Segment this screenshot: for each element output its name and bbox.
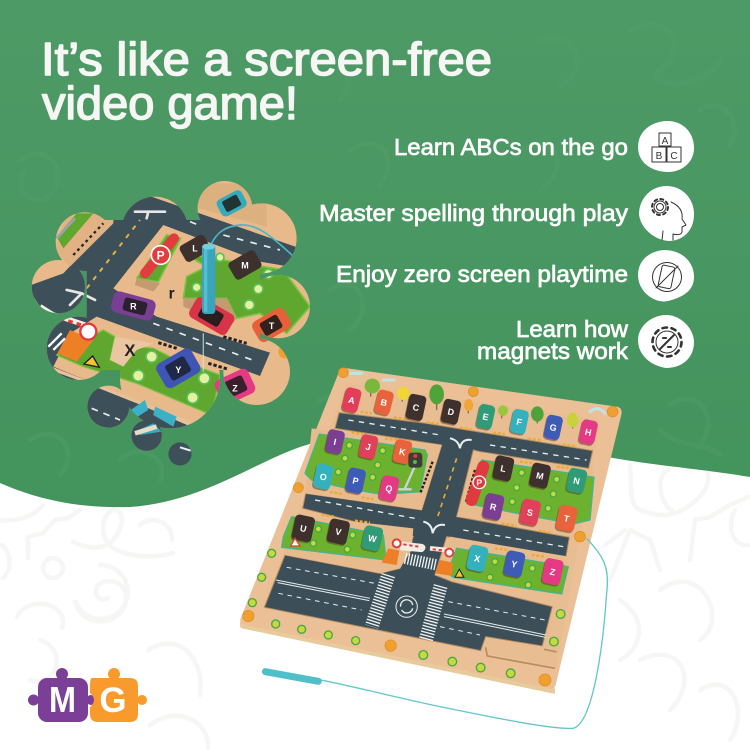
feature: magnets: [477, 315, 694, 368]
board: cars A–Z: T: [563, 513, 571, 524]
board: cars A–Z: X: [473, 553, 481, 564]
cloud: dark undersurface at bottom and lower-left: [41, 307, 192, 466]
feature: learn ABCs: A: [662, 136, 669, 147]
feature: learn ABCs: C: [670, 151, 678, 162]
board: recessed track floor: [263, 383, 601, 667]
board: string: [320, 538, 607, 728]
board: cars A–Z: [291, 386, 599, 586]
cloud: cars: Z: [232, 383, 238, 393]
board: cars A–Z: C: [412, 402, 421, 413]
board: cars A–Z: O: [319, 471, 328, 483]
cloud: top wood strip with car F: [198, 183, 267, 226]
board: cars A–Z: U: [299, 523, 307, 534]
board: crossing barriers: [393, 539, 453, 557]
cloud: cars: [110, 189, 293, 435]
cloud: orange peg: [278, 348, 287, 358]
cloud: coins: [133, 253, 273, 403]
cloud: P sign: [145, 238, 174, 273]
board: yellow centre line: [437, 458, 457, 520]
board: green island I–Q: [305, 434, 427, 497]
board: left block top: [305, 428, 442, 510]
board: cars A–Z: A: [347, 395, 356, 406]
board: cars A–Z: G: [549, 422, 558, 433]
board: cars A–Z: M: [535, 470, 545, 482]
cloud: magnetic wand: [202, 244, 215, 314]
board: cars A–Z: Y: [510, 559, 518, 570]
board: orange ticket booths: [382, 548, 399, 565]
cloud: cars: T: [269, 321, 275, 331]
board: top-row trees: [349, 373, 605, 428]
board: cars A–Z: S: [526, 507, 534, 518]
board: cars A–Z: P: [352, 475, 360, 486]
board: cars A–Z: E: [482, 411, 490, 423]
zoomed thought-cloud view of the board: P: [157, 248, 165, 262]
cloud: green planter island: [137, 235, 310, 333]
logo: purple M piece: M: [49, 679, 76, 720]
board: cars A–Z: Q: [384, 483, 393, 494]
board: warning signs: [291, 538, 300, 546]
title: [41, 33, 492, 129]
board: cars A–Z: I: [333, 437, 337, 447]
feature: learn ABCs: Learn ABCs on the go: [394, 134, 628, 160]
board: magnetic wand: [265, 672, 318, 681]
board: P parking sign: [472, 467, 486, 500]
feature: magnets: magnets work: [477, 338, 629, 364]
board: cars A–Z: W: [367, 533, 378, 545]
cloud: orange sign: [57, 330, 93, 362]
board: road markings: [276, 420, 587, 637]
title: video game!: [42, 77, 298, 129]
cloud: lower island: [53, 367, 194, 426]
cloud: slot letter r: r: [169, 285, 175, 302]
cloud: dark roads: [27, 195, 300, 376]
board: cars A–Z: F: [516, 417, 523, 428]
board: cars A–Z: N: [572, 475, 581, 487]
title: It’s like a screen-free: [41, 33, 492, 85]
board: orange pegs: [243, 368, 618, 686]
logo: orange G piece: G: [99, 681, 127, 720]
board: cars A–Z: D: [447, 406, 456, 418]
board: crosswalks: [372, 558, 441, 639]
background: white wave: [0, 433, 750, 750]
board: cars A–Z: R: [489, 501, 498, 513]
board: cars A–Z: K: [398, 446, 407, 458]
feature: zero screen: [336, 250, 694, 301]
cloud: road markings: [87, 220, 140, 288]
board: notch groove at bottom right: [486, 647, 557, 668]
logo: MG puzzle pieces: [28, 668, 147, 722]
zoomed thought-cloud view of the board: [32, 181, 310, 466]
board: front edge: [240, 622, 555, 694]
board: cars A–Z: H: [584, 427, 592, 438]
cloud: cars: M: [241, 260, 249, 270]
magnetic maze board: [240, 368, 622, 728]
board: cars A–Z: J: [365, 442, 372, 452]
board: green island U–W: [282, 517, 386, 560]
feature: learn ABCs: [394, 121, 694, 172]
board: cars A–Z: L: [500, 463, 507, 474]
board: wooden top: [240, 368, 622, 689]
cloud: cars: Y: [175, 365, 181, 375]
board: cars A–Z: B: [380, 397, 389, 408]
feature: master spelling: Master spelling through play: [319, 200, 629, 226]
feature: learn ABCs: B: [656, 151, 663, 162]
board: P parking sign: P: [476, 477, 482, 487]
cloud: string: [210, 224, 292, 256]
cloud: cars: R: [130, 301, 137, 311]
cloud: cars: L: [192, 244, 198, 254]
board: cars A–Z: V: [334, 526, 342, 537]
board: green island L–T: [467, 460, 594, 524]
feature: zero screen: Enjoy zero screen playtime: [336, 261, 628, 287]
board: green coins: [248, 442, 565, 678]
cloud: slot letter X: X: [124, 341, 136, 360]
board: roads: [264, 413, 593, 651]
cloud: pale magnet line: [202, 333, 204, 372]
board: green island X–Z: [447, 548, 568, 594]
feature: master spelling: [319, 186, 694, 241]
feature list: [319, 121, 694, 368]
feature: magnets: Learn how: [516, 316, 628, 342]
board: traffic light: [399, 453, 422, 489]
board: parking stops: [322, 412, 576, 557]
board: cars A–Z: Z: [549, 567, 557, 578]
